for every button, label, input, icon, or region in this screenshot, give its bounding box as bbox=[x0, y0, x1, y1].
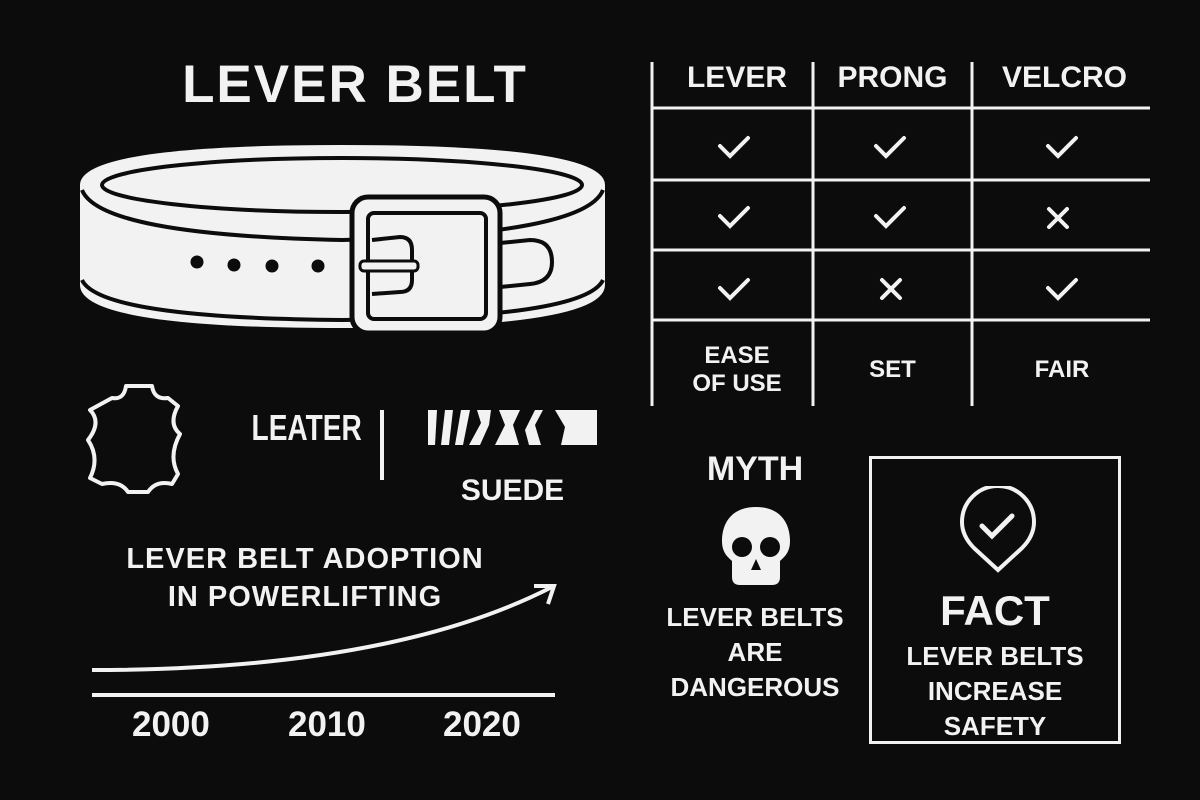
chart: adoption: 2010 bbox=[288, 705, 366, 744]
title: LEVER BELT bbox=[182, 55, 528, 114]
myth text: ARE bbox=[728, 637, 782, 667]
table footer labels bbox=[692, 342, 782, 397]
fact text: LEVER BELTS bbox=[906, 641, 1084, 671]
comparison table: SET bbox=[869, 356, 916, 383]
chart title bbox=[126, 543, 484, 613]
axis labels: 2000 bbox=[132, 705, 210, 744]
trend arrow bbox=[92, 584, 557, 697]
comparison table: FAIR bbox=[1035, 356, 1089, 383]
chart title: IN POWERLIFTING bbox=[168, 581, 442, 613]
icon: shield check bbox=[960, 486, 1036, 573]
fact heading: FACT bbox=[940, 587, 1050, 634]
chart title: LEVER BELT ADOPTION bbox=[126, 543, 484, 575]
panel: fact bbox=[869, 456, 1121, 744]
divider bbox=[380, 410, 384, 480]
myth heading: MYTH bbox=[707, 450, 803, 488]
label: suede: SUEDE bbox=[461, 474, 564, 507]
icon: skull bbox=[722, 507, 790, 585]
comparison table bbox=[650, 61, 1150, 406]
label: leather: LEATER bbox=[252, 407, 362, 448]
icon: suede stripes bbox=[428, 410, 597, 445]
table headers: LEVER bbox=[687, 61, 787, 94]
chart: adoption bbox=[92, 543, 557, 744]
table footer labels: EASE bbox=[704, 342, 770, 369]
table footer labels: OF USE bbox=[692, 370, 782, 397]
chart: adoption: 2020 bbox=[443, 705, 521, 744]
icon: leather hide bbox=[86, 384, 182, 494]
fact text: SAFETY bbox=[944, 711, 1046, 741]
comparison table: VELCRO bbox=[1002, 61, 1127, 94]
myth text bbox=[666, 602, 844, 702]
fact text: INCREASE bbox=[928, 676, 1062, 706]
comparison table: PRONG bbox=[837, 61, 948, 94]
panel: myth bbox=[666, 450, 844, 702]
myth text: DANGEROUS bbox=[670, 672, 840, 702]
fact text bbox=[906, 641, 1084, 741]
myth text: LEVER BELTS bbox=[666, 602, 844, 632]
